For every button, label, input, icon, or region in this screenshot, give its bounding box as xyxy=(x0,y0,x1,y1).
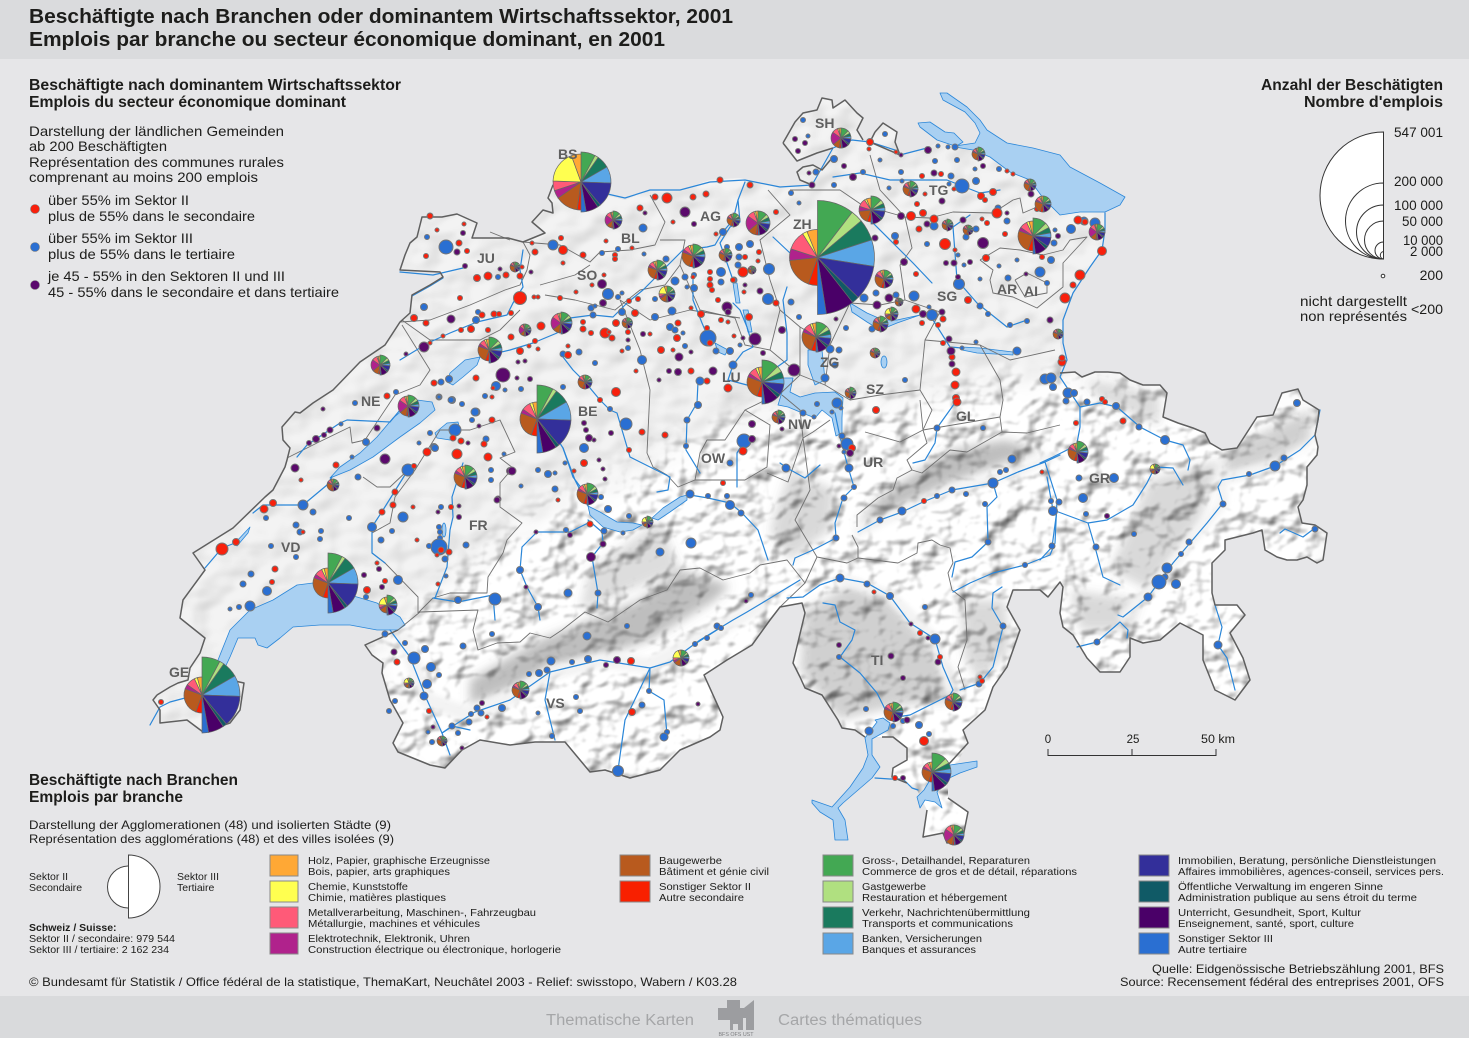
heading: dominant sector legend: Beschäftigte nach dominantem Wirtschaftssektor xyxy=(29,77,401,94)
pie: Lugano xyxy=(922,753,951,791)
canton labels: GL xyxy=(956,408,976,424)
legend: half-circle diagram sector II / III xyxy=(29,855,219,956)
canton labels: UR xyxy=(863,454,883,470)
pie: Winterthur xyxy=(859,196,885,224)
legend: sector II branches: Construction électrique ou électronique, horlogerie xyxy=(308,944,561,956)
size legend: Anzahl der Beschätigten xyxy=(1261,77,1443,94)
legend: construction and other secondary: Bâtiment et génie civil xyxy=(659,866,769,878)
canton labels: AG xyxy=(700,208,721,224)
canton labels: NE xyxy=(361,393,380,409)
relief map of Switzerland xyxy=(154,99,1326,836)
canton labels: TI xyxy=(871,652,883,668)
scale bar: 50 km xyxy=(1201,734,1235,746)
title: Emplois par branche ou secteur économique dominant, en 2001 xyxy=(29,29,665,51)
legend: construction and other secondary xyxy=(620,855,769,904)
canton labels: OW xyxy=(701,450,726,466)
footer captions: Cartes thématiques xyxy=(778,1012,922,1029)
legend: sector II branches: Holz, Papier, graphische Erzeugnisse xyxy=(308,855,490,867)
heading: branch legend: Beschäftigte nach Branchen xyxy=(29,772,238,789)
canton labels: SZ xyxy=(866,381,884,397)
source note: Quelle: Eidgenössische Betriebszählung 2001, BFS xyxy=(1152,962,1444,976)
footer captions: Thematische Karten xyxy=(546,1012,694,1029)
scale bar: 0 xyxy=(1045,734,1051,746)
legend: sector III branches column 2: Immobilien, Beratung, persönliche Dienstleistungen xyxy=(1178,855,1436,867)
canton labels: AR xyxy=(997,281,1017,297)
legend: half-circle diagram sector II / III: Tertiaire xyxy=(177,882,215,894)
legend: sector III branches column 1 xyxy=(823,855,1077,956)
canton labels: NW xyxy=(788,416,812,432)
canton labels: BS xyxy=(558,146,577,162)
logo: BFS OFS UST xyxy=(718,1000,754,1038)
legend note: rural communes: Représentation des communes rurales xyxy=(29,154,284,170)
legend: sector III branches column 2: Öffentliche Verwaltung im engeren Sinne xyxy=(1178,881,1383,893)
note: agglomerations: Représentation des agglomérations (48) et des villes isolées (9) xyxy=(29,832,394,846)
legend: half-circle diagram sector II / III: Schweiz / Suisse: xyxy=(29,922,117,934)
legend note: rural communes xyxy=(29,123,284,185)
legend: sector III branches column 2: Affaires immobilières, agences-conseil, services pers. xyxy=(1178,866,1444,878)
heading: branch legend: Emplois par branche xyxy=(29,789,183,806)
lakes xyxy=(212,93,1125,840)
legend: sector III branches column 1: Restauration et hébergement xyxy=(862,892,1007,904)
note: agglomerations xyxy=(29,818,394,846)
source note: Source: Recensement fédéral des entreprises 2001, OFS xyxy=(1120,975,1444,989)
legend: sector III branches column 2: Unterricht, Gesundheit, Sport, Kultur xyxy=(1178,907,1362,919)
size legend: nicht dargestellt xyxy=(1300,293,1407,309)
legend: construction and other secondary: Autre secondaire xyxy=(659,892,744,904)
size legend: 50 000 xyxy=(1402,213,1443,229)
source note xyxy=(1120,962,1444,989)
copyright line: © Bundesamt für Statistik / Office fédéral de la statistique, ThemaKart, Neuchâtel 2003 - Relief: swisstopo, Wabern / K03.28 xyxy=(29,975,737,989)
canton labels: JU xyxy=(477,250,495,266)
pie: Zürich xyxy=(789,200,875,315)
legend: sector III branches column 1: Transports et communications xyxy=(862,918,1013,930)
legend: sector III branches column 2: Autre tertiaire xyxy=(1178,944,1247,956)
legend: sector II branches xyxy=(270,855,561,956)
legend: construction and other secondary: Baugewerbe xyxy=(659,855,722,867)
legend: dominant sector dots: plus de 55% dans le secondaire xyxy=(48,208,255,224)
legend: sector II branches: Elektrotechnik, Elektronik, Uhren xyxy=(308,933,470,945)
footer band xyxy=(0,996,1469,1038)
legend: dominant sector dots: plus de 55% dans le tertiaire xyxy=(48,246,235,262)
canton boundaries xyxy=(287,155,1087,690)
legend: sector II branches: Bois, papier, arts graphiques xyxy=(308,866,450,878)
legend: sector II branches: Métallurgie, machines et véhicules xyxy=(308,918,480,930)
legend: half-circle diagram sector II / III: Sektor II xyxy=(29,871,68,883)
dots: mixed sectors II and III xyxy=(291,136,1110,780)
legend: half-circle diagram sector II / III: Sektor III / tertiaire: 2 162 234 xyxy=(29,944,169,956)
canton labels xyxy=(169,115,1110,711)
size legend: non représentés xyxy=(1300,308,1407,324)
canton labels: AI xyxy=(1024,283,1038,299)
legend: sector II branches: Chemie, Kunststoffe xyxy=(308,881,408,893)
header band xyxy=(0,0,1469,59)
legend: sector III branches column 2: Enseignement, santé, sport, culture xyxy=(1178,918,1354,930)
canton labels: SH xyxy=(815,115,834,131)
pie: Lausanne xyxy=(313,553,358,613)
canton labels: BL xyxy=(621,230,640,246)
legend: sector III branches column 2 xyxy=(1139,855,1444,956)
canton labels: SO xyxy=(577,267,597,283)
legend: dominant sector dots: über 55% im Sektor III xyxy=(48,230,193,246)
footer captions xyxy=(546,1012,922,1029)
small agglomeration pies xyxy=(327,128,1160,845)
legend: construction and other secondary: Sonstiger Sektor II xyxy=(659,881,751,893)
legend: half-circle diagram sector II / III: Sektor III xyxy=(177,871,219,883)
note: agglomerations: Darstellung der Agglomerationen (48) und isolierten Städte (9) xyxy=(29,818,391,832)
dots: dominant sector III xyxy=(228,118,1318,776)
legend note: rural communes: Darstellung der ländlichen Gemeinden xyxy=(29,123,284,139)
legend note: rural communes: comprenant au moins 200 emplois xyxy=(29,169,258,185)
size legend: 200 xyxy=(1420,267,1443,283)
canton labels: SG xyxy=(937,288,957,304)
legend: sector III branches column 1: Gastgewerbe xyxy=(862,881,926,893)
title: Beschäftigte nach Branchen oder dominantem Wirtschaftssektor, 2001 xyxy=(29,6,733,28)
title xyxy=(29,6,733,51)
canton labels: TG xyxy=(929,182,949,198)
canton labels: ZG xyxy=(820,354,840,370)
size legend xyxy=(1261,77,1443,324)
size legend: 200 000 xyxy=(1394,173,1443,189)
pie: Basel xyxy=(553,152,611,212)
scale bar xyxy=(1045,734,1235,756)
pie: Luzern xyxy=(747,360,784,404)
canton labels: VD xyxy=(281,539,300,555)
size legend: 547 001 xyxy=(1394,124,1443,140)
scale bar: 25 xyxy=(1127,734,1139,746)
size legend: 10 000 xyxy=(1403,232,1443,248)
legend: half-circle diagram sector II / III: Secondaire xyxy=(29,882,82,894)
canton labels: ZH xyxy=(793,216,812,232)
legend: sector II branches: Metallverarbeitung, Maschinen-, Fahrzeugbau xyxy=(308,907,536,919)
legend: sector III branches column 2: Administration publique au sens étroit du terme xyxy=(1178,892,1417,904)
canton labels: FR xyxy=(469,517,488,533)
legend: dominant sector dots: über 55% im Sektor II xyxy=(48,192,189,208)
heading: branch legend xyxy=(29,772,238,806)
canton labels: GE xyxy=(169,664,189,680)
legend: sector III branches column 1: Banken, Versicherungen xyxy=(862,933,982,945)
heading: dominant sector legend xyxy=(29,77,401,111)
heading: dominant sector legend: Emplois du secteur économique dominant xyxy=(29,94,347,111)
legend: sector II branches: Chimie, matières plastiques xyxy=(308,892,446,904)
legend note: rural communes: ab 200 Beschäftigten xyxy=(29,138,167,154)
legend: sector III branches column 1: Banques et assurances xyxy=(862,944,976,956)
country outline xyxy=(153,98,1327,843)
legend: sector III branches column 1: Commerce de gros et de détail, réparations xyxy=(862,866,1077,878)
size legend: 100 000 xyxy=(1394,197,1443,213)
pie: Zug xyxy=(802,322,831,352)
legend: sector III branches column 1: Gross-, Detailhandel, Reparaturen xyxy=(862,855,1030,867)
canton labels: LU xyxy=(722,369,741,385)
canton labels: GR xyxy=(1089,470,1110,486)
legend: dominant sector dots: je 45 - 55% in den Sektoren II und III xyxy=(47,268,285,284)
legend: half-circle diagram sector II / III: Sektor II / secondaire: 979 544 xyxy=(29,933,175,945)
size legend: Nombre d'emplois xyxy=(1304,94,1443,111)
pie: Bern xyxy=(520,385,571,453)
size legend: 2 000 xyxy=(1410,243,1443,259)
pie: St. Gallen xyxy=(1018,218,1051,254)
size legend: <200 xyxy=(1411,301,1443,317)
logo: BFS OFS UST: BFS OFS UST xyxy=(718,1032,754,1038)
legend: sector III branches column 1: Verkehr, Nachrichtenübermittlung xyxy=(862,907,1030,919)
legend: sector III branches column 2: Sonstiger Sektor III xyxy=(1178,933,1273,945)
legend: dominant sector dots xyxy=(30,192,339,300)
pie: Genève xyxy=(184,657,240,733)
rivers xyxy=(150,140,1320,790)
canton labels: BE xyxy=(578,403,597,419)
legend: dominant sector dots: 45 - 55% dans le secondaire et dans tertiaire xyxy=(48,284,339,300)
canton labels: VS xyxy=(546,695,565,711)
dots: dominant sector II xyxy=(158,138,1126,780)
